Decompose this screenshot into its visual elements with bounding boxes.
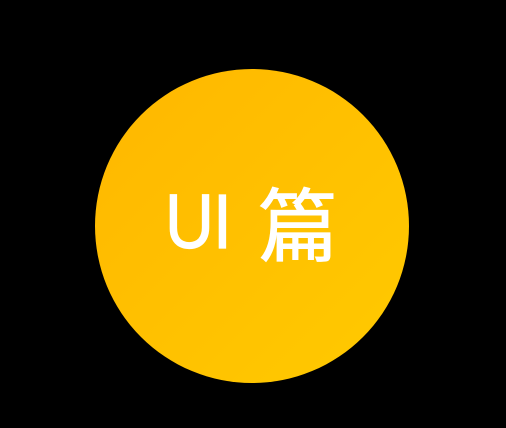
title: UI: UI [165,179,231,265]
title: 篇: 篇 [258,163,338,279]
yellow circle badge [95,69,409,383]
